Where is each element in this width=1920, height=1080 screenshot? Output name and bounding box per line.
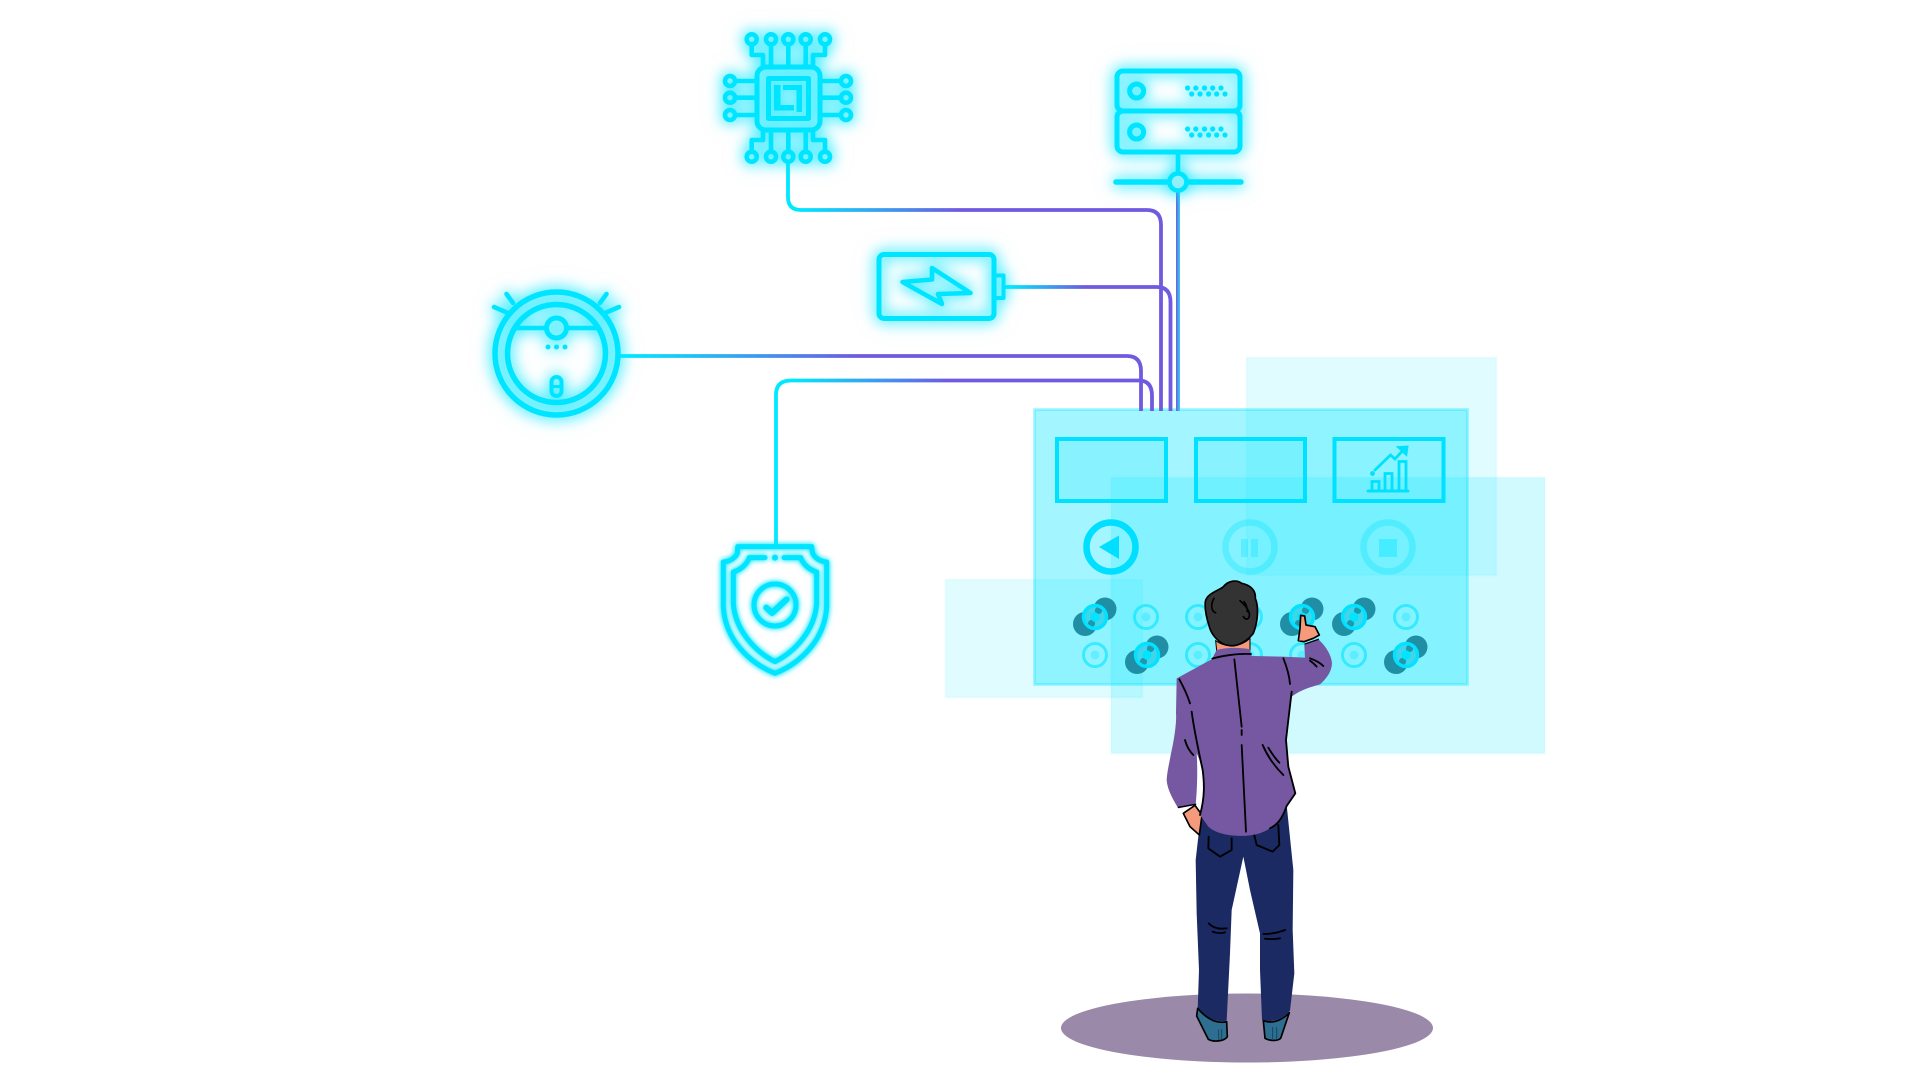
icon: security shield <box>723 547 827 673</box>
screen 3 <box>1334 439 1444 501</box>
icon: robot vacuum <box>494 292 619 415</box>
icon: processor chip <box>725 34 851 162</box>
button: pause <box>1226 522 1274 572</box>
shoe: right <box>1263 1013 1289 1040</box>
hand: pointing <box>1298 615 1319 642</box>
panel: lower right backdrop <box>1111 478 1545 754</box>
screen 2 <box>1196 439 1305 501</box>
icon: growth chart <box>1368 447 1408 491</box>
jeans details <box>1208 825 1285 1039</box>
connector: shield to panel <box>776 380 1152 548</box>
neck <box>1216 638 1250 651</box>
panel: upper right backdrop <box>1246 358 1496 576</box>
connector: chip to panel <box>788 160 1161 411</box>
shirt <box>1167 639 1332 836</box>
hair <box>1205 581 1258 646</box>
knob grid <box>1073 598 1428 674</box>
connector: server to panel <box>1176 190 1180 411</box>
figure: person from behind <box>1167 581 1332 1041</box>
hand: in pocket <box>1183 805 1202 835</box>
screen 1 <box>1057 439 1166 501</box>
icon: battery <box>879 254 1004 318</box>
shoe: left <box>1197 1008 1227 1041</box>
panel: main control board <box>1034 410 1468 684</box>
icon: server <box>1116 71 1241 190</box>
shirt details <box>1178 639 1323 832</box>
jeans <box>1196 805 1294 1021</box>
hair strands <box>1212 598 1249 619</box>
connector: battery to panel <box>1005 287 1170 411</box>
floor shadow <box>1061 994 1433 1062</box>
button: rewind <box>1086 522 1136 572</box>
button: stop <box>1364 522 1412 572</box>
connector: robot to panel <box>618 356 1141 411</box>
panel: left backdrop <box>946 580 1142 698</box>
